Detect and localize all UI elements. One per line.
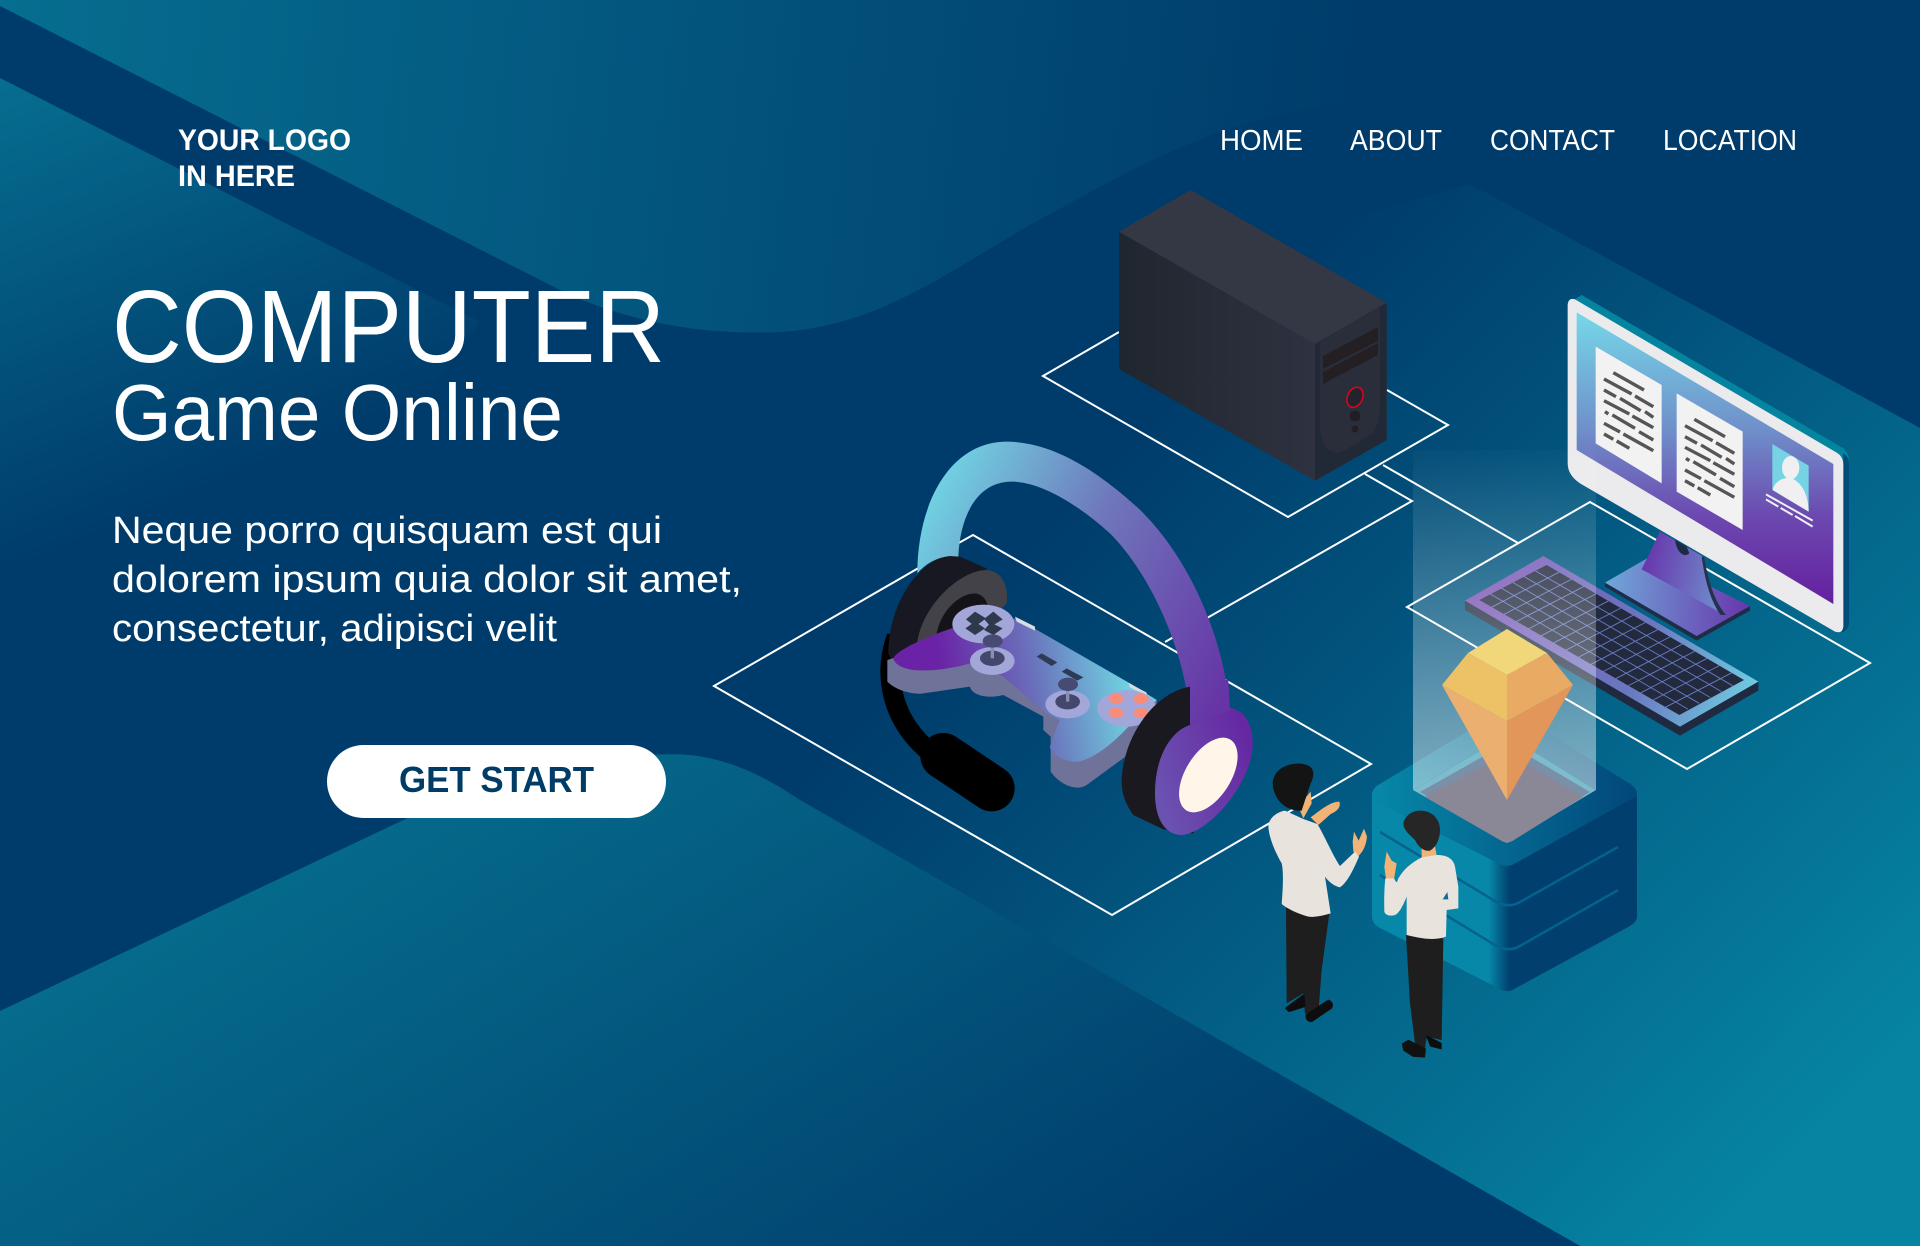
navigation menu — [1220, 125, 1797, 157]
holographic light column — [1413, 450, 1596, 790]
navigation menu: HOME — [1220, 125, 1303, 157]
title: COMPUTER — [112, 269, 665, 384]
navigation menu: LOCATION — [1663, 125, 1797, 157]
background: right teal slope — [800, 184, 1920, 1246]
title — [112, 269, 665, 457]
power button — [1344, 385, 1366, 410]
logo: YOUR LOGO — [178, 124, 351, 157]
background: bottom teal wave — [0, 754, 1580, 1246]
person one — [1268, 764, 1367, 1021]
microphone — [943, 756, 992, 788]
button: get start: GET START — [399, 759, 594, 800]
controller body — [887, 605, 1157, 788]
monitor back edge — [1573, 295, 1849, 633]
navigation menu: ABOUT — [1350, 125, 1442, 157]
right ear cup — [1122, 680, 1253, 835]
headset and game controller — [887, 442, 1253, 835]
headband — [917, 442, 1230, 723]
monitor — [1568, 295, 1849, 641]
description paragraph: Neque porro quisquam est qui — [112, 510, 662, 552]
description paragraph: dolorem ipsum quia dolor sit amet, — [112, 559, 742, 601]
start and select buttons — [1037, 653, 1083, 681]
light floor — [1413, 735, 1596, 843]
keyboard keys grid — [1479, 565, 1744, 715]
description paragraph — [112, 510, 742, 650]
title: Game Online — [112, 368, 563, 457]
keyboard — [1465, 556, 1758, 736]
gem — [1442, 629, 1573, 800]
pedestal base — [1372, 709, 1637, 991]
profile card — [1766, 444, 1813, 527]
microphone boom — [890, 637, 932, 753]
computer tower — [1119, 190, 1387, 481]
person two — [1384, 811, 1458, 1057]
background: upper teal wave — [0, 0, 1920, 333]
joystick left — [970, 647, 1015, 675]
background: left teal wedge — [0, 78, 480, 560]
navigation menu: CONTACT — [1490, 125, 1615, 157]
logo: IN HERE — [178, 160, 295, 193]
document panels — [1596, 347, 1743, 530]
logo — [178, 124, 351, 193]
platform outlines — [714, 332, 1870, 915]
action buttons — [1097, 690, 1156, 727]
monitor frame — [1568, 299, 1843, 632]
left ear cup — [888, 556, 1007, 673]
button: get start — [327, 745, 666, 818]
description paragraph: consectetur, adipisci velit — [112, 608, 557, 650]
monitor stand — [1605, 532, 1750, 641]
joystick right — [1045, 690, 1090, 718]
monitor screen — [1577, 312, 1833, 604]
d-pad — [952, 605, 1014, 643]
